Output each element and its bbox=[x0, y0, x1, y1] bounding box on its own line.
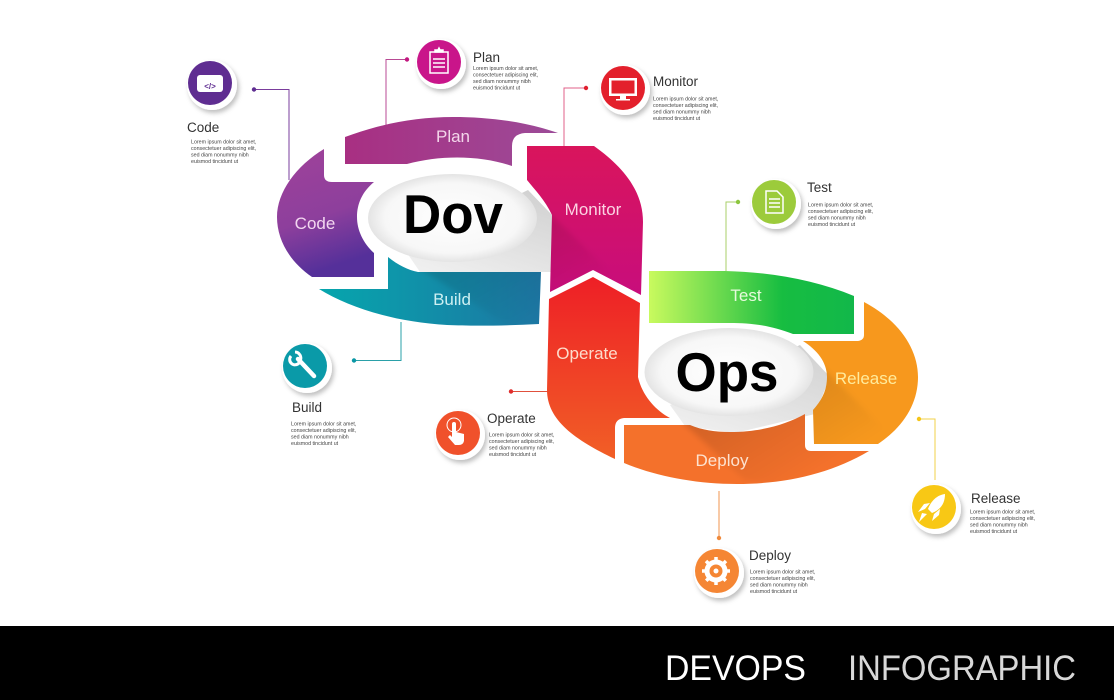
callout: Build: Build bbox=[292, 400, 322, 415]
center pill: Dov: Dov bbox=[403, 183, 503, 245]
callout: Monitor: consectetuer adipiscing elit, bbox=[653, 103, 718, 109]
segment labels: Test bbox=[730, 286, 762, 305]
icon: wrench bbox=[290, 352, 314, 376]
segment labels: Build bbox=[433, 290, 471, 309]
callout: Plan bbox=[416, 39, 538, 92]
icon: monitor bbox=[609, 78, 637, 100]
callout: Monitor: Monitor bbox=[653, 74, 699, 89]
segment: Plan bbox=[345, 117, 558, 166]
segment: Monitor bbox=[527, 146, 643, 295]
callout: Monitor: sed diam nonummy nibh bbox=[653, 110, 711, 116]
callout: Deploy: consectetuer adipiscing elit, bbox=[750, 576, 815, 582]
segment: Operate bbox=[547, 277, 670, 459]
callout: Plan: euismod tincidunt ut bbox=[473, 86, 521, 92]
connector lines and dots bbox=[252, 57, 935, 540]
callout: Build: consectetuer adipiscing elit, bbox=[291, 428, 356, 434]
callout: Code: Code bbox=[187, 120, 219, 135]
callout: Deploy: sed diam nonummy nibh bbox=[750, 582, 808, 588]
icon: touch hand bbox=[447, 418, 464, 445]
shadow backdrop: Dov bbox=[405, 190, 552, 272]
center pill: Dov bbox=[368, 174, 537, 262]
center pill: Ops: Ops bbox=[676, 341, 778, 403]
callout: Deploy bbox=[694, 548, 815, 598]
callout: Release: consectetuer adipiscing elit, bbox=[970, 516, 1035, 522]
callout: Release: Lorem ipsum dolor sit amet, bbox=[970, 510, 1035, 516]
callout: Code: sed diam nonummy nibh bbox=[191, 152, 249, 158]
long shadow: Ops bbox=[683, 370, 860, 478]
callout: Code: Lorem ipsum dolor sit amet, bbox=[191, 140, 256, 146]
callout: Test bbox=[751, 179, 873, 229]
callout: Deploy: euismod tincidunt ut bbox=[750, 589, 798, 595]
segment: Release bbox=[803, 302, 918, 444]
center pill: Ops bbox=[644, 328, 814, 416]
footer bar bbox=[0, 626, 1114, 700]
callout: Test: euismod tincidunt ut bbox=[808, 222, 856, 228]
callout: Monitor bbox=[600, 65, 718, 122]
callout: Operate bbox=[435, 410, 554, 460]
segment labels: Deploy bbox=[696, 451, 749, 470]
callout: Test: Lorem ipsum dolor sit amet, bbox=[808, 202, 873, 208]
segment labels: Monitor bbox=[565, 200, 622, 219]
subtitle: INFOGRAPHIC bbox=[848, 649, 1076, 688]
callout: Test: consectetuer adipiscing elit, bbox=[808, 209, 873, 215]
segment labels: Code bbox=[295, 214, 335, 233]
callout: Release: sed diam nonummy nibh bbox=[970, 522, 1028, 528]
callout: Code: consectetuer adipiscing elit, bbox=[191, 146, 256, 152]
callout: Build: Lorem ipsum dolor sit amet, bbox=[291, 422, 356, 428]
shadow backdrop: Ops bbox=[670, 345, 830, 433]
callout: Plan: Lorem ipsum dolor sit amet, bbox=[473, 66, 538, 72]
callout: Release: euismod tincidunt ut bbox=[970, 529, 1018, 535]
callout: Monitor: euismod tincidunt ut bbox=[653, 116, 701, 122]
callout: Build: euismod tincidunt ut bbox=[291, 441, 339, 447]
callout: Release: Release bbox=[971, 491, 1021, 506]
callout: Monitor: Lorem ipsum dolor sit amet, bbox=[653, 96, 718, 102]
segment labels: Release bbox=[835, 369, 897, 388]
segment: Test bbox=[649, 271, 854, 334]
callout: Plan: consectetuer adipiscing elit, bbox=[473, 72, 538, 78]
segment: Code bbox=[277, 149, 374, 277]
callout: Build: sed diam nonummy nibh bbox=[291, 434, 349, 440]
long shadow: Dov bbox=[424, 215, 586, 304]
callout: Operate: Operate bbox=[487, 411, 536, 426]
icon: code window: </> bbox=[204, 82, 216, 91]
callout: Build bbox=[282, 343, 356, 447]
segment: Deploy bbox=[624, 414, 869, 484]
icon: clipboard bbox=[430, 48, 448, 73]
segment: Build bbox=[319, 257, 541, 326]
callout: Code: euismod tincidunt ut bbox=[191, 159, 239, 165]
icon: document bbox=[766, 191, 783, 213]
callout: Deploy: Lorem ipsum dolor sit amet, bbox=[750, 570, 815, 576]
callout: Release bbox=[911, 484, 1035, 535]
callout: Plan: Plan bbox=[473, 50, 500, 65]
callout: Code bbox=[187, 60, 256, 165]
callout: Test: sed diam nonummy nibh bbox=[808, 216, 866, 222]
callout: Operate: sed diam nonummy nibh bbox=[489, 446, 547, 452]
title: DEVOPS bbox=[665, 649, 806, 688]
segment labels: Plan bbox=[436, 127, 470, 146]
icon: rocket bbox=[918, 494, 945, 522]
segment labels: Operate bbox=[556, 344, 618, 363]
icon: gear bbox=[702, 557, 730, 585]
callout: Plan: sed diam nonummy nibh bbox=[473, 79, 531, 85]
callout: Test: Test bbox=[807, 180, 832, 195]
callout: Operate: consectetuer adipiscing elit, bbox=[489, 439, 554, 445]
callout: Operate: euismod tincidunt ut bbox=[489, 452, 537, 458]
segment labels bbox=[295, 127, 897, 470]
callout: Operate: Lorem ipsum dolor sit amet, bbox=[489, 432, 554, 438]
callout: Deploy: Deploy bbox=[749, 548, 791, 563]
